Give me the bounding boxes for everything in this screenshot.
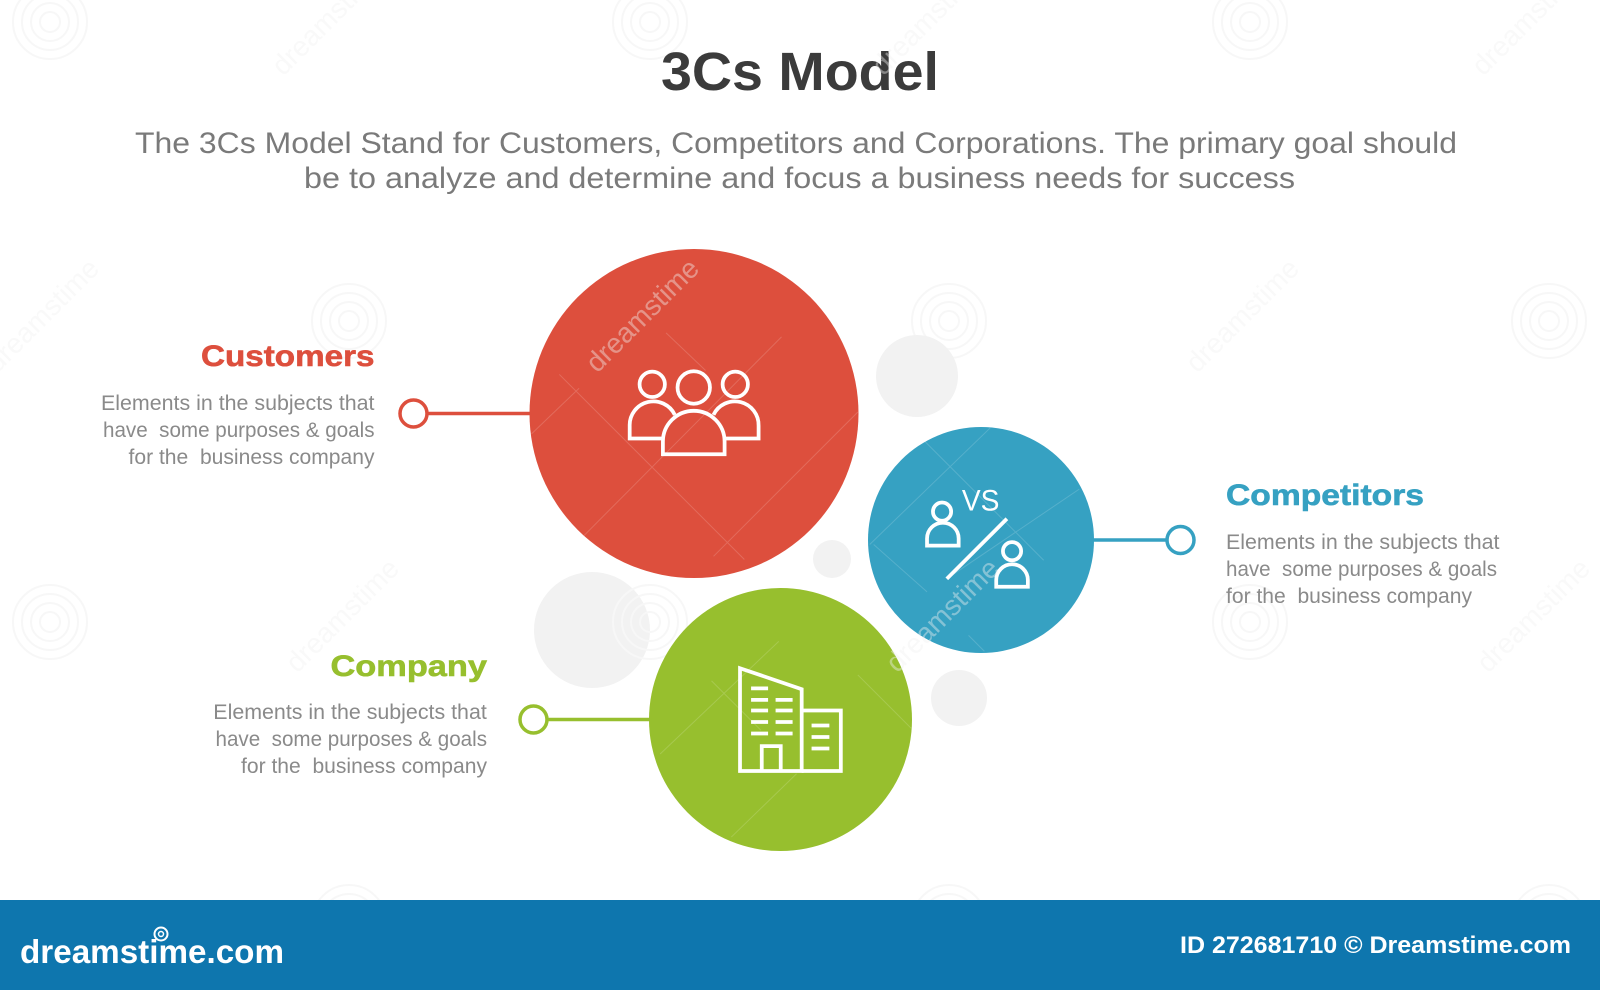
watermark text: dreamstime — [580, 253, 705, 378]
icon: competitors versus: VS — [962, 484, 999, 517]
watermark text — [0, 0, 1596, 678]
connector: competitors — [1092, 526, 1194, 554]
connector: company — [520, 706, 651, 733]
text block: company: have some purposes & goals — [216, 727, 487, 751]
text block: competitors: for the business company — [1226, 584, 1472, 608]
connector: customers — [400, 400, 532, 427]
circle: customers — [530, 249, 858, 578]
circle: competitors — [868, 427, 1094, 653]
text block: competitors — [1226, 479, 1500, 608]
text block: customers: have some purposes & goals — [103, 418, 374, 442]
footer credit: ID 272681710 © Dreamstime.com — [1180, 932, 1571, 959]
circle: company — [649, 588, 912, 851]
watermark text: dreamstime — [880, 553, 1005, 678]
icon: competitors versus — [927, 484, 1028, 587]
text block: company: Company — [330, 650, 487, 683]
decorative grey bubbles — [534, 335, 987, 726]
text block: competitors: have some purposes & goals — [1226, 557, 1497, 581]
title: 3Cs Model — [661, 42, 939, 102]
text block: company: for the business company — [241, 754, 487, 778]
text block: customers: for the business company — [128, 445, 375, 469]
footer logo: dreamstime.com — [20, 933, 284, 970]
icon: customers group — [630, 371, 759, 454]
text block: customers: Customers — [201, 340, 374, 373]
footer bar — [0, 900, 1600, 990]
subtitle: be to analyze and determine and focus a business needs for success — [304, 162, 1295, 195]
text block: company: Elements in the subjects that — [213, 700, 487, 724]
watermark text: dreamstime — [1471, 553, 1596, 678]
subtitle: The 3Cs Model Stand for Customers, Competitors and Corporations. The primary goal should — [135, 127, 1457, 160]
watermark text: dreamstime — [1180, 253, 1305, 378]
icon: company building — [740, 668, 841, 771]
text block: competitors: Elements in the subjects that — [1226, 530, 1500, 554]
text block: competitors: Competitors — [1226, 479, 1424, 512]
subtitle — [135, 127, 1457, 195]
text block: customers — [101, 340, 375, 469]
text block: company — [213, 650, 487, 778]
text block: customers: Elements in the subjects that — [101, 391, 375, 415]
watermark text: dreamstime — [280, 553, 405, 678]
